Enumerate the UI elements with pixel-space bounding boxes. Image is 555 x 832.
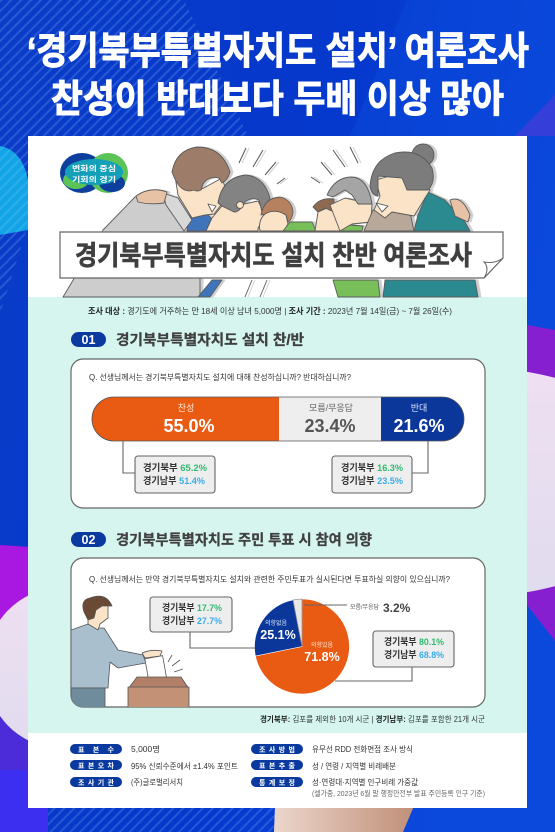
main panel xyxy=(28,136,527,808)
stacked bar: 21.6% xyxy=(393,416,445,436)
survey info: 조사 대상 : 경기도에 거주하는 만 18세 이상 남녀 5,000명 | 조사 기간 : 2023년 7월 14일(금) ~ 7월 26일(수) xyxy=(88,306,452,316)
person: grandparent xyxy=(327,177,414,231)
stacked bar: 모름/무응답 xyxy=(309,402,353,413)
methodology labels: 표본추출 xyxy=(259,761,296,770)
stacked bar: 반대 xyxy=(411,403,427,413)
callout: no answer: 모름/무응답 xyxy=(350,604,379,611)
pie chart xyxy=(254,599,349,694)
callout: intent by region: 경기남부 68.8% xyxy=(384,649,445,661)
icon: burst lines xyxy=(239,147,358,184)
section heading 02: 경기북부특별자치도 주민 투표 시 참여 의향 xyxy=(116,532,372,549)
callout: support by region: 경기남부 51.4% xyxy=(143,475,206,487)
callout: support by region xyxy=(123,441,215,493)
methodology labels: 표본오차 xyxy=(78,761,115,770)
methodology labels: 통계보정 xyxy=(259,778,295,787)
methodology values: 성 / 연령 / 지역별 비례배분 xyxy=(312,761,396,771)
person: child right xyxy=(313,199,345,231)
icon: voter and ballot box xyxy=(71,596,189,708)
methodology labels: 조사방법 xyxy=(259,745,295,754)
section heading 01: 경기북부특별자치도 설치 찬/반 xyxy=(116,332,304,349)
callout: opposition by region xyxy=(332,441,428,493)
section heading 01: 01 xyxy=(82,333,95,347)
person: woman with grey hair xyxy=(206,175,270,231)
banner: 경기북부특별자치도 설치 찬반 여론조사 xyxy=(75,241,472,271)
stacked bar xyxy=(92,397,464,441)
region note: 경기북부: 김포를 제외한 10개 시군 | 경기남부: 김포를 포함한 21개 시군 xyxy=(260,714,485,724)
methodology values: 95% 신뢰수준에서 ±1.4% 포인트 xyxy=(131,761,238,771)
title: 찬성이 반대보다 두배 이상 많아 xyxy=(51,79,504,121)
stacked bar: 찬성 xyxy=(178,403,194,413)
methodology values: (셀가중, 2023년 6월 말 행정안전부 발표 주민등록 인구 기준) xyxy=(312,788,485,798)
section heading 02: 02 xyxy=(82,533,95,547)
callout: no intent by region: 경기북부 17.7% xyxy=(162,602,223,614)
callout: no intent by region: 경기남부 27.7% xyxy=(162,615,223,627)
callout: opposition by region: 경기북부 16.3% xyxy=(341,462,404,474)
logo: 기회의 경기 xyxy=(72,174,116,184)
question 2: Q. 선생님께서는 만약 경기북부특별자치도 설치와 관련한 주민투표가 실시된다면 투표하실 의향이 있으십니까? xyxy=(89,574,451,584)
pie chart: 71.8% xyxy=(304,650,340,664)
methodology labels xyxy=(70,744,303,787)
methodology labels: 표 본 수 xyxy=(78,746,115,754)
methodology values: 유무선 RDD 전화면접 조사 방식 xyxy=(312,744,413,754)
methodology values xyxy=(131,744,485,798)
methodology values: 5,000명 xyxy=(131,744,160,754)
banner xyxy=(60,232,503,278)
pie chart: 25.1% xyxy=(260,628,296,642)
panel: referendum participation xyxy=(71,558,485,708)
callout: no answer: 3.2% xyxy=(383,601,411,615)
illustration: family huddle xyxy=(63,144,478,297)
logo xyxy=(60,153,128,193)
pie chart: 의향있음 xyxy=(311,641,334,649)
callout: opposition by region: 경기남부 23.5% xyxy=(341,475,404,487)
survey methodology xyxy=(70,744,485,798)
lower bodies xyxy=(198,280,478,297)
title xyxy=(27,31,529,121)
stacked bar: 23.4% xyxy=(304,416,356,436)
methodology values: (주)글로벌리서치 xyxy=(131,777,183,787)
question 1: Q. 선생님께서는 경기북부특별자치도 설치에 대해 찬성하십니까? 반대하십니까? xyxy=(89,372,352,382)
person: woman with bun xyxy=(370,144,470,231)
methodology labels: 조사기관 xyxy=(78,778,115,787)
callout: intent by region: 경기북부 80.1% xyxy=(384,636,445,648)
callout: no answer xyxy=(304,601,411,615)
callout: support by region: 경기북부 65.2% xyxy=(143,462,208,474)
callout: no intent by region xyxy=(150,597,255,648)
stacked bar: 55.0% xyxy=(163,416,215,436)
panel: support and opposition xyxy=(71,359,485,508)
callout: intent by region xyxy=(335,631,454,681)
person: man xyxy=(63,147,230,297)
person: child left xyxy=(260,197,316,231)
methodology values: 성·연령대·지역별 인구비례 가중값 xyxy=(312,777,419,787)
logo: 변화의 중심 xyxy=(72,163,116,173)
pie chart: 의향없음 xyxy=(265,619,288,627)
